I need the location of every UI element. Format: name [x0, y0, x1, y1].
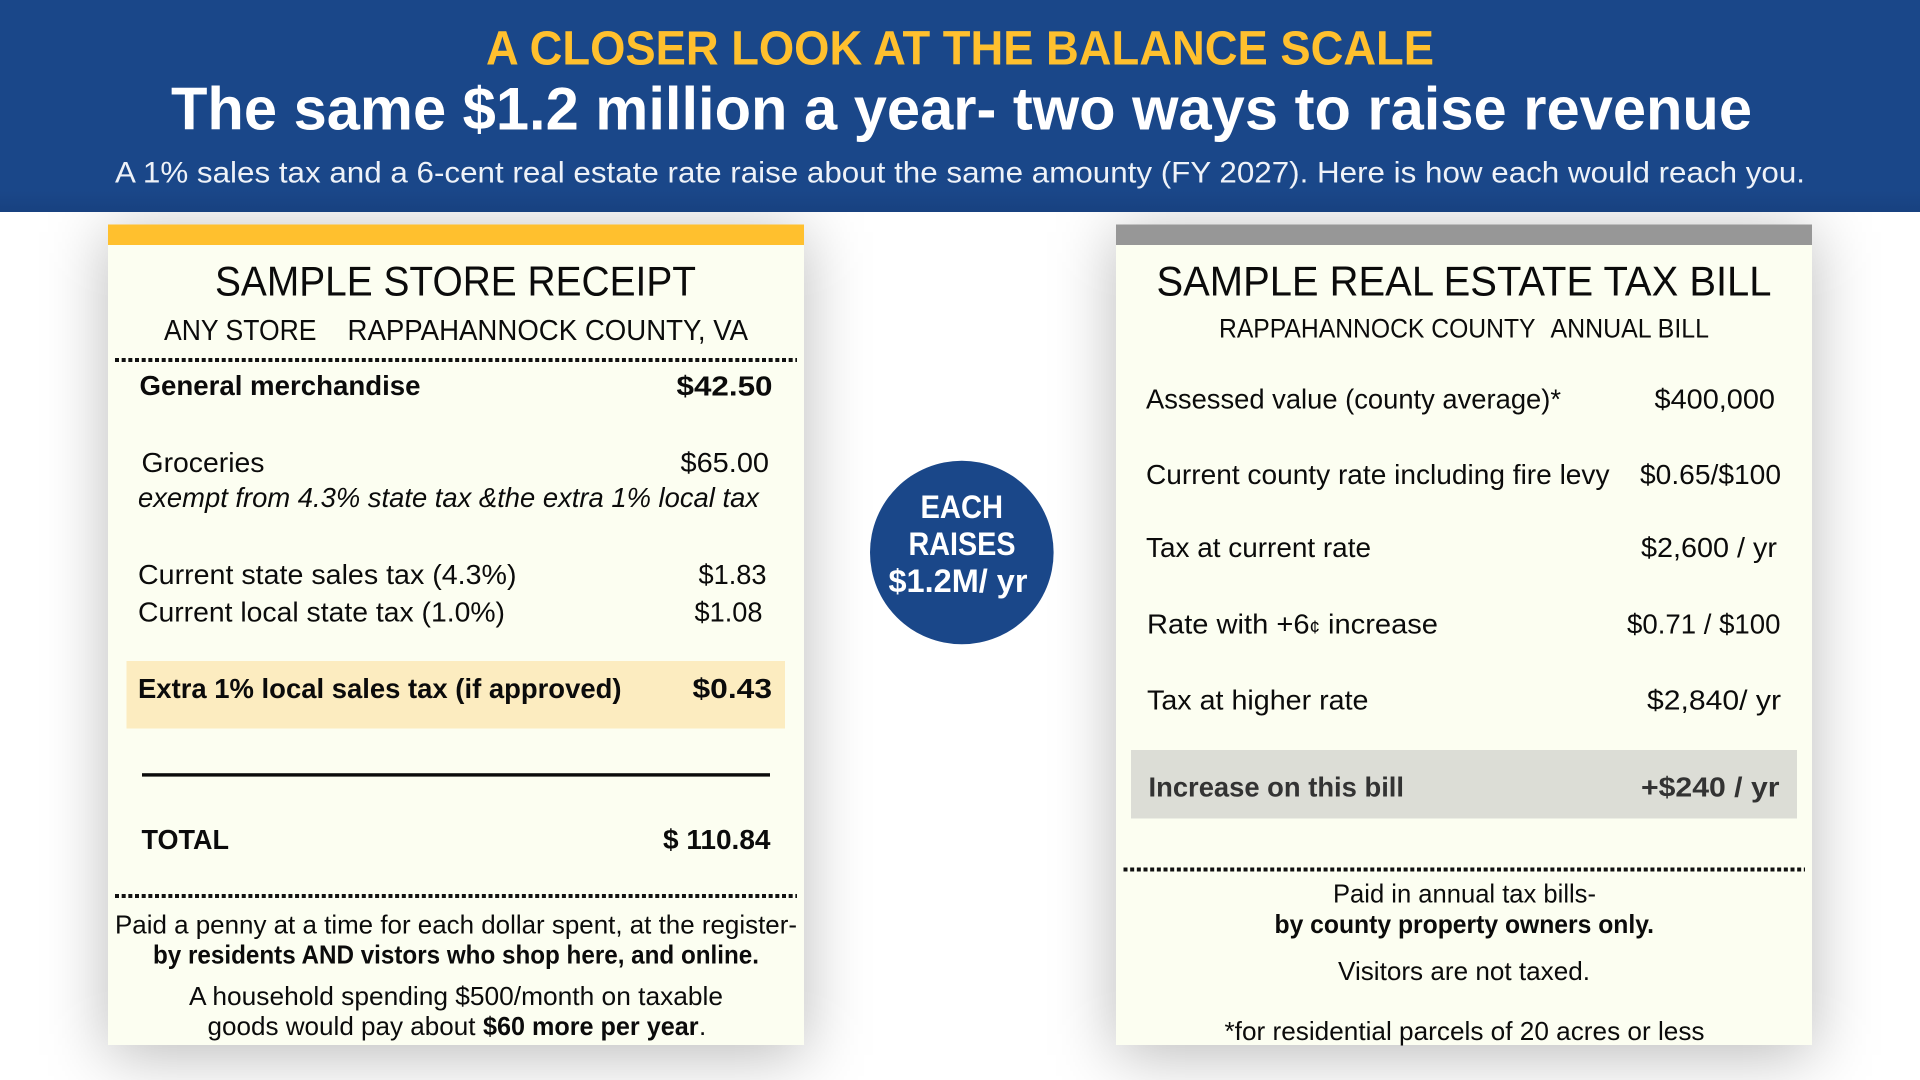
panel shadow: receipt — [108, 232, 804, 1055]
bill footnote: *for residential parcels of 20 acres or less — [1224, 1016, 1704, 1046]
row: increase highlight — [1131, 750, 1797, 818]
row: state sales tax — [138, 559, 766, 590]
panel shadow: tax bill — [1116, 232, 1812, 1055]
panel: sample store receipt — [108, 224, 804, 1045]
receipt footnote: A household spending $500/month on taxable — [189, 981, 723, 1011]
bill footnote: by county property owners only. — [1274, 909, 1654, 939]
bill footnote: Visitors are not taxed. — [1338, 956, 1590, 986]
main title: The same $1.2 million a year- two ways to raise revenue — [171, 76, 1752, 142]
callout: each raises $1.2M per year: RAISES — [908, 526, 1016, 562]
row: rate with increase — [1147, 608, 1780, 640]
row: tax at higher rate: $2,840/ yr — [1647, 684, 1781, 716]
row: increase highlight: +$240 / yr — [1641, 772, 1780, 802]
row: assessed value — [1146, 384, 1775, 414]
row: local tax: $1.08 — [694, 596, 762, 628]
receipt footnote: by residents AND vistors who shop here, and online. — [153, 940, 759, 970]
receipt footnote: Paid a penny at a time for each dollar spent, at the register- — [115, 910, 797, 940]
row: tax at current rate: $2,600 / yr — [1641, 532, 1777, 563]
row: tax at higher rate — [1147, 684, 1781, 716]
row: general merchandise: $42.50 — [676, 370, 772, 402]
row: total: $ 110.84 — [663, 824, 771, 855]
row: groceries: Groceries — [142, 447, 264, 478]
bill top bar — [1116, 224, 1812, 245]
row: tax at current rate: Tax at current rate — [1146, 532, 1371, 563]
row: total — [142, 824, 771, 855]
row: tax at current rate — [1146, 532, 1777, 563]
row: increase highlight: Increase on this bill — [1148, 772, 1404, 802]
row: total: TOTAL — [142, 824, 229, 855]
receipt footnote: . — [699, 1011, 706, 1041]
row: extra local sales tax highlight: $0.43 — [692, 673, 772, 704]
row: current rate: $0.65/$100 — [1640, 459, 1781, 490]
callout: each raises $1.2M per year: $1.2M/ yr — [888, 563, 1028, 599]
row: rate with increase: Rate with +6 ¢ increase — [1147, 608, 1438, 640]
row: current rate: Current county rate including fire levy — [1146, 459, 1610, 490]
row: extra local sales tax highlight — [126, 661, 785, 728]
row: local tax — [138, 596, 762, 628]
row: general merchandise — [140, 370, 772, 402]
row: assessed value: Assessed value (county average)* — [1146, 384, 1561, 414]
row: general merchandise: General merchandise — [140, 370, 420, 401]
row: groceries — [142, 447, 769, 478]
kicker heading: A CLOSER LOOK AT THE BALANCE SCALE — [486, 22, 1434, 76]
groceries note: exempt from 4.3% state tax &the extra 1% local tax — [138, 482, 760, 513]
row: assessed value: $400,000 — [1654, 384, 1775, 414]
bill title: SAMPLE REAL ESTATE TAX BILL — [1156, 258, 1772, 304]
row: state sales tax: Current state sales tax (4.3%) — [138, 559, 516, 590]
store name: ANY STORE — [164, 315, 316, 347]
row: rate with increase: $0.71 / $100 — [1627, 608, 1780, 640]
row: state sales tax: $1.83 — [698, 559, 766, 590]
receipt footnote: $60 more per year — [483, 1011, 698, 1041]
receipt top bar — [108, 224, 804, 245]
receipt footnote: goods would pay about — [208, 1011, 476, 1041]
receipt title: SAMPLE STORE RECEIPT — [215, 258, 696, 304]
panel: sample real estate tax bill — [1116, 224, 1812, 1046]
row: local tax: Current local state tax (1.0%) — [138, 596, 505, 628]
bill type: ANNUAL BILL — [1550, 314, 1709, 344]
subtitle: A 1% sales tax and a 6-cent real estate rate raise about the same amounty (FY 2027). Here is how each would reach you. — [115, 156, 1805, 190]
header banner — [0, 0, 1920, 212]
row: tax at higher rate: Tax at higher rate — [1147, 684, 1368, 716]
row: groceries: $65.00 — [680, 447, 769, 478]
callout: each raises $1.2M per year — [870, 461, 1054, 644]
bill footnote — [1224, 878, 1704, 1046]
store county: RAPPAHANNOCK COUNTY, VA — [348, 315, 749, 347]
callout: each raises $1.2M per year: EACH — [920, 489, 1003, 525]
bill county: RAPPAHANNOCK COUNTY — [1219, 314, 1536, 344]
row: extra local sales tax highlight: Extra 1% local sales tax (if approved) — [138, 673, 622, 704]
bill footnote: Paid in annual tax bills- — [1333, 878, 1596, 908]
receipt footnote — [115, 910, 797, 1041]
